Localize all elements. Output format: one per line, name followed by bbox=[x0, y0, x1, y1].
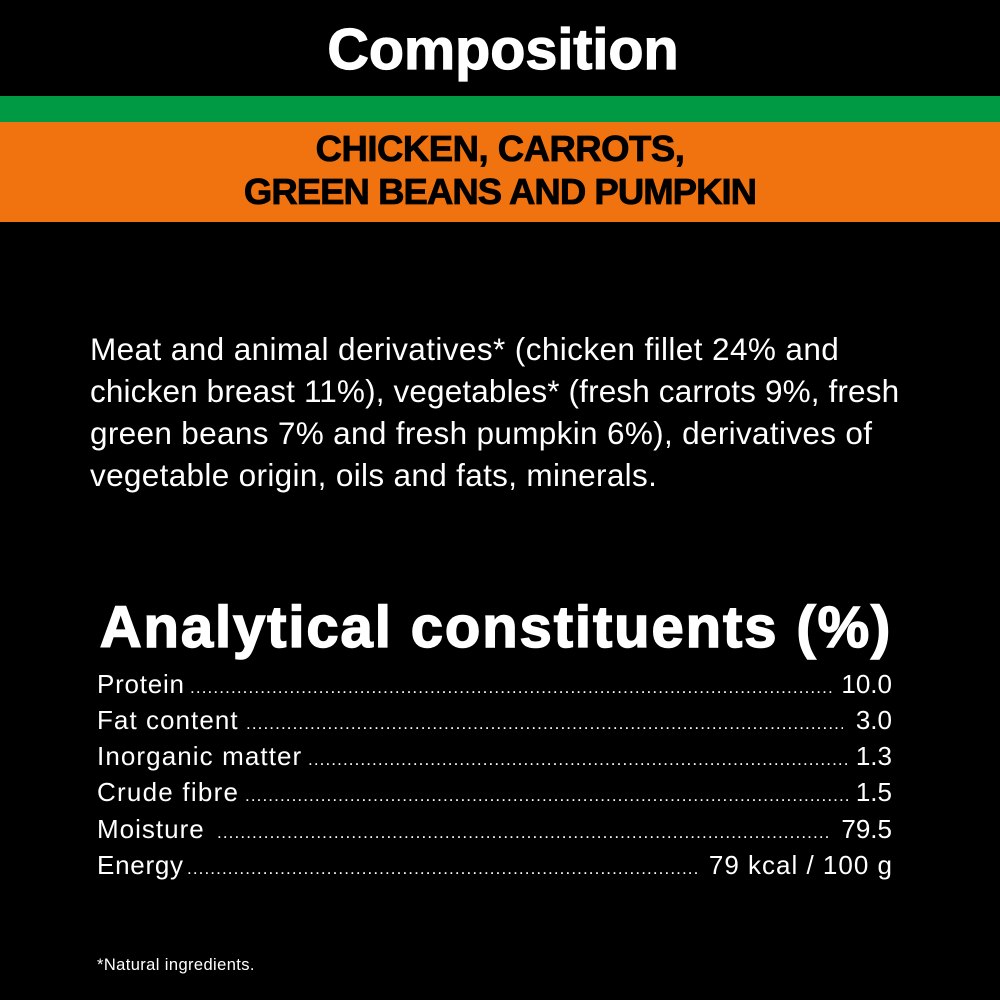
row: energy bbox=[97, 850, 893, 880]
footnote: *Natural ingredients. bbox=[97, 956, 255, 974]
composition text bbox=[90, 331, 899, 493]
row: inorganic: 1.3 bbox=[856, 741, 892, 771]
row: fibre: Crude fibre bbox=[97, 777, 239, 807]
row: fat: 3.0 bbox=[856, 705, 892, 735]
row: fat bbox=[97, 705, 892, 735]
analytical heading: Analytical constituents (%) bbox=[100, 595, 892, 660]
composition text: vegetable origin, oils and fats, minerals. bbox=[90, 457, 657, 493]
row: protein: Protein bbox=[97, 669, 185, 699]
row: energy: 79 kcal / 100 g bbox=[709, 850, 893, 880]
row: protein bbox=[97, 669, 892, 699]
row: fibre: 1.5 bbox=[856, 777, 892, 807]
analytical table bbox=[97, 669, 893, 880]
row: energy: Energy bbox=[97, 850, 184, 880]
composition text: Meat and animal derivatives* (chicken fillet 24% and bbox=[90, 331, 839, 367]
row: inorganic bbox=[97, 741, 892, 771]
title: Composition bbox=[327, 18, 679, 82]
row: moisture bbox=[97, 814, 892, 844]
green band bbox=[0, 96, 1000, 122]
row: moisture: Moisture bbox=[97, 814, 205, 844]
row: fat: Fat content bbox=[97, 705, 239, 735]
orange banner: GREEN BEANS AND PUMPKIN bbox=[244, 171, 756, 212]
row: protein: 10.0 bbox=[841, 669, 892, 699]
composition text: chicken breast 11%), vegetables* (fresh carrots 9%, fresh bbox=[90, 373, 899, 409]
orange banner: CHICKEN, CARROTS, bbox=[316, 128, 684, 169]
row: moisture: 79.5 bbox=[841, 814, 892, 844]
composition text: green beans 7% and fresh pumpkin 6%), derivatives of bbox=[90, 415, 872, 451]
orange banner bbox=[0, 122, 1000, 222]
row: inorganic: Inorganic matter bbox=[97, 741, 302, 771]
row: fibre bbox=[97, 777, 892, 807]
